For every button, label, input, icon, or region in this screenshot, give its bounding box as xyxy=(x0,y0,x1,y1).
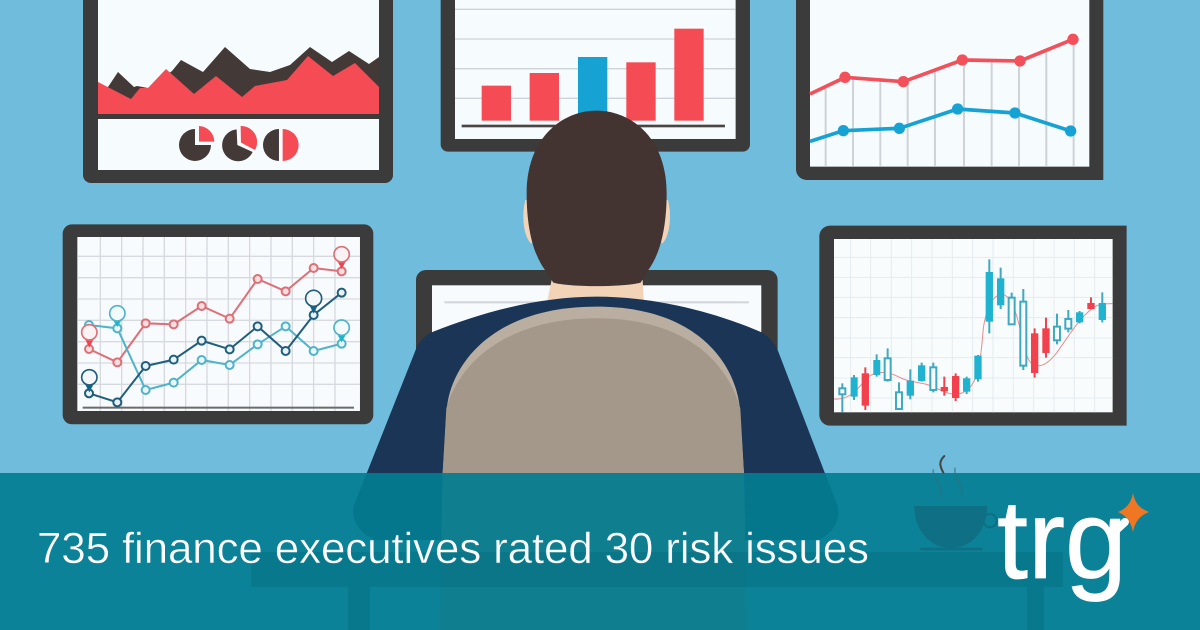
panel: middle-right monitor with candlestick chart xyxy=(819,226,1127,426)
area chart xyxy=(98,47,379,119)
blue line series xyxy=(810,103,1076,141)
headline: 735 finance executives rated 30 risk issues xyxy=(37,524,869,573)
panel: top-centre monitor with bar chart xyxy=(441,0,750,152)
icon: orange star xyxy=(1118,493,1149,532)
caption band xyxy=(0,473,1200,630)
suit jacket xyxy=(353,297,838,540)
desk xyxy=(251,552,1063,630)
light blue line series xyxy=(85,321,346,394)
candlesticks xyxy=(839,259,1106,412)
red line series xyxy=(85,264,346,366)
map pins xyxy=(82,247,349,392)
pie icons xyxy=(179,126,299,161)
trend curve xyxy=(834,294,1113,399)
head hair xyxy=(527,111,667,286)
logo: trg with orange star: trg xyxy=(997,477,1127,602)
panel: middle-left monitor with pin line chart xyxy=(63,224,373,424)
ears and neck xyxy=(523,200,670,304)
illustration: person at desk seen from behind xyxy=(353,111,838,630)
panel: top-right monitor with line chart xyxy=(796,0,1103,180)
central monitor xyxy=(416,270,778,437)
dark blue line series xyxy=(85,289,346,406)
panel: top-left monitor with area chart xyxy=(83,0,393,183)
red line series xyxy=(810,34,1079,94)
icon: coffee cup with steam xyxy=(914,456,997,550)
bar chart xyxy=(462,29,725,127)
chair back xyxy=(440,307,747,630)
